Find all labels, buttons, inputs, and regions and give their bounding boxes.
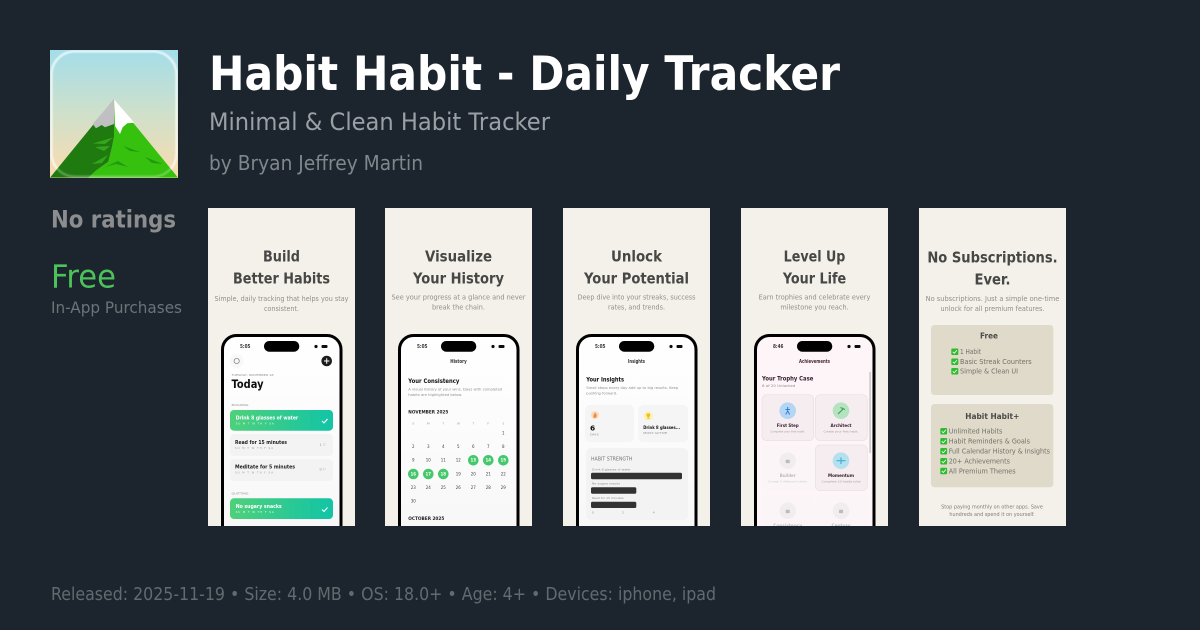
screenshot 4: Level Up Your Life: Momentum — [828, 473, 854, 479]
screenshot 1: Build Better Habits: 0 ⚐ — [320, 468, 326, 472]
screenshot 5: No Subscriptions. Ever.: 20+ Achievements — [949, 458, 1010, 466]
icon: app icon, snow-capped mountain — [50, 50, 178, 178]
screenshot 2: Visualize Your History: 21 — [486, 471, 491, 476]
screenshot 2: Visualize Your History: 16 — [411, 471, 416, 476]
screenshot 2: Visualize Your History: 6 — [472, 444, 475, 449]
screenshot 1: Build Better Habits: Read for 15 minutes — [235, 440, 287, 446]
screenshot 5: No Subscriptions. Ever.: Ever. — [974, 270, 1010, 288]
screenshot 5: No Subscriptions. Ever.: 1 Habit — [960, 348, 981, 356]
screenshot 5: No Subscriptions. Ever.: hundreds and spend it on yourself. — [949, 512, 1035, 518]
screenshot 4: Level Up Your Life: Complete your first habit. — [770, 429, 805, 433]
screenshot 3: Unlock Your Potential: Your Insights — [586, 376, 624, 384]
screenshot 1: Build Better Habits: 1 ⚐ — [320, 443, 326, 447]
screenshot 3: Unlock Your Potential: Unlock — [611, 248, 663, 266]
screenshot 4: Level Up Your Life: Architect — [830, 423, 852, 429]
screenshot 2: Visualize Your History: T — [441, 422, 444, 426]
screenshot 3: Unlock Your Potential: Drink 8 glasses... — [643, 425, 680, 431]
screenshot 2: Visualize Your History: 9 — [412, 458, 415, 463]
screenshot 4: Level Up Your Life: Create 5 different habits — [768, 479, 808, 483]
screenshot 3: Unlock Your Potential: DAYS — [590, 433, 599, 437]
screenshot 4: Level Up Your Life — [741, 208, 888, 546]
screenshot 1: Build Better Habits: TUESDAY, NOVEMBER 18 — [230, 373, 274, 377]
screenshot 3: Unlock Your Potential: 5:05 — [595, 344, 606, 350]
screenshot 1: Build Better Habits: SU M T W TH F SA — [236, 422, 274, 426]
screenshot 2: Visualize Your History: 13 — [471, 458, 476, 463]
screenshot 4: Level Up Your Life: Your Trophy Case — [761, 375, 814, 383]
screenshot 2: Visualize Your History: 1 — [502, 430, 505, 435]
screenshot 1: Build Better Habits: SU M T W TH F SA — [235, 471, 273, 475]
screenshot 2: Visualize Your History: W — [457, 422, 460, 426]
screenshot 2: Visualize Your History: OCTOBER 2025 — [408, 516, 444, 522]
footer metadata: Released: 2025-11-19 • Size: 4.0 MB • OS: 18.0+ • Age: 4+ • Devices: iphone, ipad — [51, 584, 716, 605]
screenshot 3: Unlock Your Potential — [563, 208, 710, 546]
screenshot 3: Unlock Your Potential: HABIT STRENGTH — [591, 456, 633, 462]
screenshot 2: Visualize Your History: F — [487, 422, 489, 426]
screenshot 1: Build Better Habits: SU M T W TH F SA — [236, 510, 274, 514]
screenshot 4: Level Up Your Life: Builder — [780, 473, 796, 479]
subtitle: Minimal & Clean Habit Tracker — [209, 108, 550, 136]
screenshot 2: Visualize Your History: 18 — [441, 471, 446, 476]
screenshot 2: Visualize Your History: 22 — [501, 471, 506, 476]
screenshot 3: Unlock Your Potential: 2 — [622, 510, 624, 514]
screenshot 5: No Subscriptions. Ever.: Habit Reminders & Goals — [949, 438, 1030, 446]
screenshot 3: Unlock Your Potential: rates, and trends. — [608, 304, 665, 312]
screenshot 2: Visualize Your History: S — [502, 422, 504, 426]
screenshot 2: Visualize Your History: 30 — [411, 499, 416, 504]
screenshot 3: Unlock Your Potential: pushing forward. — [586, 392, 617, 396]
screenshot 2: Visualize Your History: 17 — [426, 471, 431, 476]
screenshot 3: Unlock Your Potential: Insights — [628, 359, 645, 365]
screenshot 2: Visualize Your History: Your Consistency — [407, 377, 460, 385]
screenshot 2: Visualize Your History: See your progress at a glance and never — [392, 294, 526, 302]
screenshot 2: Visualize Your History: A visual history of your wins. Days with completed — [408, 387, 502, 391]
screenshot 1: Build Better Habits: BUILDING — [232, 403, 249, 407]
screenshot 2: Visualize Your History: 3 — [427, 444, 430, 449]
screenshot 5: No Subscriptions. Ever.: Stop paying monthly on other apps. Save — [941, 505, 1043, 511]
screenshot 1: Build Better Habits: 5:05 — [240, 344, 251, 350]
screenshot 5: No Subscriptions. Ever.: No subscriptions. Just a simple one-time — [926, 295, 1059, 303]
screenshot 3: Unlock Your Potential: Drink 8 glasses of water — [592, 467, 632, 471]
screenshot 1: Build Better Habits: Drink 8 glasses of water — [236, 416, 298, 422]
screenshot 4: Level Up Your Life: Complete 10 habits total — [822, 479, 861, 483]
screenshot 2: Visualize Your History: 29 — [501, 485, 506, 490]
screenshot 3: Unlock Your Potential: 0 — [592, 510, 594, 514]
screenshot 2: Visualize Your History: 5 — [457, 444, 460, 449]
screenshot 2: Visualize Your History: 8 — [502, 444, 505, 449]
screenshot 2: Visualize Your History: 4 — [442, 444, 445, 449]
screenshot 1: Build Better Habits: Better Habits — [233, 270, 330, 288]
screenshot 2: Visualize Your History: 25 — [441, 485, 446, 490]
in-app purchases note: In-App Purchases — [51, 298, 182, 317]
screenshot 2: Visualize Your History: Visualize — [425, 248, 492, 266]
screenshot 2: Visualize Your History: Your History — [412, 270, 504, 288]
screenshot 1: Build Better Habits: consistent. — [264, 305, 299, 313]
screenshot 3: Unlock Your Potential: MOST ACTIVE — [643, 431, 667, 435]
screenshot 4: Level Up Your Life: Century — [832, 523, 851, 529]
rating: No ratings — [51, 206, 176, 234]
screenshot 5: No Subscriptions. Ever.: Basic Streak Counters — [960, 358, 1032, 366]
screenshot 3: Unlock Your Potential: Read for 15 minutes — [592, 496, 624, 500]
screenshot 2: Visualize Your History: 23 — [411, 485, 416, 490]
screenshot 4: Level Up Your Life: 8:46 — [773, 344, 784, 350]
screenshot 2: Visualize Your History: 10 — [426, 458, 431, 463]
screenshot 5: No Subscriptions. Ever.: Unlimited Habits — [949, 428, 1003, 436]
screenshot 5: No Subscriptions. Ever.: unlock for all premium features. — [940, 305, 1044, 313]
screenshot 5: No Subscriptions. Ever. — [919, 208, 1066, 526]
screenshot 5: No Subscriptions. Ever.: No Subscriptions. — [927, 248, 1058, 266]
screenshot 3: Unlock Your Potential: Deep dive into your streaks, success — [578, 294, 696, 302]
screenshot 2: Visualize Your History: 7 — [487, 444, 490, 449]
screenshot 4: Level Up Your Life: Your Life — [782, 270, 846, 288]
screenshot 2: Visualize Your History: M — [427, 422, 430, 426]
screenshot 2: Visualize Your History: 14 — [486, 458, 491, 463]
screenshot 2: Visualize Your History: 20 — [471, 471, 476, 476]
screenshot 2: Visualize Your History: 26 — [456, 485, 461, 490]
screenshot 4: Level Up Your Life: Consistency — [773, 523, 802, 529]
screenshot 2: Visualize Your History: 28 — [486, 485, 491, 490]
screenshot 4: Level Up Your Life: Achievements — [799, 359, 830, 365]
screenshot 2: Visualize Your History: 12 — [456, 458, 461, 463]
screenshot 1: Build Better Habits: Simple, daily tracking that helps you stay — [214, 295, 348, 303]
screenshot 2: Visualize Your History: History — [450, 359, 467, 365]
screenshot 3: Unlock Your Potential: Small steps every day add up to big results. Keep — [586, 386, 679, 390]
title: Habit Habit - Daily Tracker — [209, 47, 841, 102]
screenshot 3: Unlock Your Potential: No sugary snacks — [592, 482, 620, 486]
screenshot 4: Level Up Your Life: Create your first habit. — [824, 429, 859, 433]
screenshot 2: Visualize Your History: break the chain. — [432, 304, 485, 312]
screenshot 2: Visualize Your History: 15 — [501, 458, 506, 463]
screenshot 4: Level Up Your Life: Level Up — [784, 248, 845, 266]
screenshot 2: Visualize Your History: 5:05 — [417, 344, 428, 350]
screenshot 2: Visualize Your History: 24 — [426, 485, 431, 490]
screenshot 1: Build Better Habits: Build — [263, 248, 300, 266]
screenshot 2: Visualize Your History: T — [471, 422, 474, 426]
screenshot 5: No Subscriptions. Ever.: Habit Habit+ — [965, 412, 1019, 421]
screenshot 4: Level Up Your Life: 6 of 20 Unlocked — [762, 384, 795, 388]
screenshot 1: Build Better Habits: SU M T W TH F SA — [235, 446, 273, 450]
screenshot 2: Visualize Your History: 11 — [441, 458, 446, 463]
screenshot 3: Unlock Your Potential: 4 — [653, 510, 655, 514]
screenshot 3: Unlock Your Potential: Your Potential — [583, 270, 689, 288]
screenshot 3: Unlock Your Potential: 6 — [590, 423, 595, 432]
screenshot 1: Build Better Habits — [208, 208, 355, 546]
screenshot 1: Build Better Habits: QUITTING — [232, 491, 249, 495]
screenshot 5: No Subscriptions. Ever.: Simple & Clean UI — [960, 368, 1018, 376]
screenshot 1: Build Better Habits: Today — [232, 377, 264, 391]
screenshot 2: Visualize Your History: NOVEMBER 2025 — [408, 409, 448, 415]
screenshot 2: Visualize Your History: 19 — [456, 471, 461, 476]
screenshot 2: Visualize Your History: 27 — [471, 485, 476, 490]
screenshot 2: Visualize Your History — [385, 208, 532, 546]
screenshot 5: No Subscriptions. Ever.: All Premium Themes — [949, 467, 1016, 475]
screenshot 4: Level Up Your Life: Earn trophies and celebrate every — [759, 294, 870, 302]
screenshot 2: Visualize Your History: 2 — [412, 444, 415, 449]
screenshot 5: No Subscriptions. Ever.: Full Calendar History & Insights — [949, 448, 1050, 456]
screenshot 2: Visualize Your History: S — [412, 422, 414, 426]
screenshot 1: Build Better Habits: No sugary snacks — [236, 504, 282, 510]
screenshot 4: Level Up Your Life: First Step — [777, 423, 799, 429]
screenshot 1: Build Better Habits: Meditate for 5 minutes — [235, 465, 295, 471]
screenshot 5: No Subscriptions. Ever.: Free — [980, 331, 998, 340]
developer: by Bryan Jeffrey Martin — [209, 151, 423, 175]
screenshot 2: Visualize Your History: habits are highlighted below. — [408, 393, 462, 397]
screenshot 4: Level Up Your Life: milestone you reach. — [780, 304, 849, 312]
price: Free — [51, 258, 116, 296]
